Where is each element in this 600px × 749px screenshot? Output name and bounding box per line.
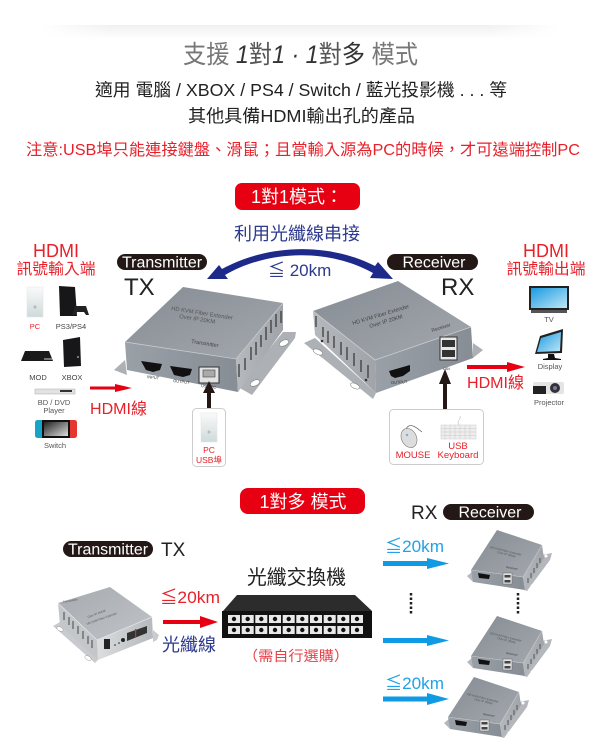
fiber cable label: 光纖線 bbox=[162, 635, 216, 655]
output heading: 訊號輸出端 bbox=[506, 260, 586, 278]
receiver device: Over IP 20KM bbox=[369, 314, 404, 330]
icon: Display bbox=[535, 329, 563, 371]
arrow: USB to receiver bbox=[439, 369, 451, 409]
PC USB port box bbox=[192, 408, 226, 466]
receiver unit 3 bbox=[444, 677, 529, 738]
distance label: ≦ 20km bbox=[268, 261, 331, 280]
input heading: HDMI bbox=[33, 241, 79, 261]
transmitter device: Transmitter bbox=[191, 339, 219, 349]
blue arrow 3 bbox=[383, 693, 449, 705]
subtitle line 2: 其他具備HDMI輸出孔的產品 bbox=[188, 106, 415, 126]
title: 支援 1對1 · 1對多 模式 bbox=[183, 41, 418, 69]
output heading bbox=[506, 241, 586, 278]
PC USB port box: USB埠 bbox=[196, 455, 222, 465]
transmitter device bbox=[114, 287, 296, 395]
receiver device: LAN bbox=[443, 367, 450, 371]
arrow: double-headed fiber link bbox=[207, 249, 393, 279]
RX label 2: RX bbox=[411, 503, 438, 524]
HDMI cable label left: HDMI線 bbox=[90, 400, 147, 418]
heading pill: 1 to many mode: 1對多 模式 bbox=[259, 492, 347, 512]
PC USB port box: PC bbox=[203, 445, 215, 455]
output heading: HDMI bbox=[523, 241, 569, 261]
blue arrow 1 bbox=[383, 558, 449, 569]
fiber switch bbox=[222, 595, 372, 638]
RX label: RX bbox=[441, 274, 474, 301]
blue distance label top: ≦20km bbox=[385, 537, 444, 556]
icon: Switch: Switch bbox=[44, 441, 66, 450]
Transmitter pill 2: Transmitter bbox=[68, 542, 148, 558]
icon: PS3/PS4: PS3/PS4 bbox=[56, 322, 86, 331]
small transmitter device: Over IP 20KM bbox=[87, 609, 106, 619]
small transmitter device: Transmitter bbox=[62, 597, 78, 604]
receiver device: HD KVM Fiber Extender bbox=[352, 304, 410, 327]
Receiver pill 2 bbox=[443, 504, 534, 522]
dotted continuation right bbox=[517, 593, 519, 614]
receiver unit 1 bbox=[467, 530, 552, 591]
fiber link label: 利用光纖線串接 bbox=[234, 224, 360, 244]
heading pill: 1 to many mode bbox=[240, 488, 365, 514]
heading pill: 1 to 1 mode: 1對1模式： bbox=[251, 187, 343, 207]
Receiver pill bbox=[387, 254, 478, 272]
arrow: USB PC to transmitter bbox=[203, 381, 215, 408]
icon: mouse bbox=[398, 426, 422, 450]
dotted continuation left bbox=[410, 593, 412, 614]
icon: XBOX bbox=[62, 337, 82, 382]
transmitter device: HD KVM Fiber Extender bbox=[171, 306, 233, 322]
receiver device bbox=[304, 281, 483, 399]
transmitter device: Over IP 20KM bbox=[179, 314, 216, 326]
icon: keyboard bbox=[441, 416, 476, 439]
purchase note: （需自行選購） bbox=[243, 648, 349, 664]
red distance label: ≦20km bbox=[160, 588, 220, 607]
icon: MOD: MOD bbox=[29, 373, 47, 382]
small transmitter device bbox=[53, 587, 159, 663]
input heading: 訊號輸入端 bbox=[16, 260, 96, 278]
mouse and keyboard box bbox=[390, 410, 484, 464]
icon: BD / DVD Player: BD / DVD bbox=[38, 398, 71, 407]
HDMI cable label right: HDMI線 bbox=[467, 374, 524, 392]
Receiver pill 2: Receiver bbox=[458, 504, 522, 522]
TX label: TX bbox=[124, 274, 155, 301]
icon: PS3/PS4 bbox=[56, 286, 89, 331]
blue distance label bottom: ≦20km bbox=[385, 674, 444, 693]
small transmitter device: HD KVM Fiber Extender bbox=[86, 611, 118, 626]
icon: Projector bbox=[533, 382, 565, 407]
icon: TV bbox=[529, 286, 569, 324]
icon: Display: Display bbox=[538, 362, 563, 371]
transmitter device: USB-PC bbox=[201, 383, 217, 390]
TX label 2: TX bbox=[161, 540, 186, 561]
Receiver pill: Receiver bbox=[402, 254, 466, 272]
receiver device: OUTPUT bbox=[391, 379, 408, 385]
blue arrow 2 bbox=[383, 635, 449, 646]
mouse and keyboard box: Keyboard bbox=[438, 450, 478, 461]
switch heading: 光纖交換機 bbox=[247, 566, 346, 589]
receiver unit 2 bbox=[467, 616, 552, 677]
icon: Switch bbox=[35, 420, 77, 450]
mouse and keyboard box: MOUSE bbox=[396, 450, 430, 461]
input heading bbox=[16, 241, 96, 278]
icon: PC: PC bbox=[30, 322, 41, 331]
icon: PC bbox=[27, 287, 43, 331]
icon: Projector: Projector bbox=[534, 398, 565, 407]
icon: MOD bbox=[21, 351, 53, 382]
icon: BD / DVD Player: Player bbox=[43, 406, 65, 415]
mouse and keyboard box: USB bbox=[448, 441, 468, 452]
arrow: to switch bbox=[163, 616, 218, 628]
subtitle line 1: 適用 電腦 / XBOX / PS4 / Switch / 藍光投影機 . . . 等 bbox=[95, 80, 507, 100]
transmitter device: OUTPUT bbox=[173, 378, 190, 385]
Transmitter pill: Transmitter bbox=[122, 254, 202, 272]
arrow: HDMI input bbox=[90, 384, 132, 392]
icon: TV: TV bbox=[544, 315, 554, 324]
icon: XBOX: XBOX bbox=[62, 373, 82, 382]
icon: BD / DVD Player bbox=[35, 389, 75, 415]
arrow: HDMI output bbox=[467, 362, 525, 372]
warning note: 注意:USB埠只能連接鍵盤、滑鼠；且當輸入源為PC的時候，才可遠端控制PC bbox=[26, 140, 580, 159]
receiver device: Receiver bbox=[431, 322, 452, 334]
transmitter device: INPUT bbox=[147, 374, 160, 381]
heading pill: 1 to 1 mode bbox=[235, 183, 360, 210]
top shadow band bbox=[40, 25, 560, 39]
